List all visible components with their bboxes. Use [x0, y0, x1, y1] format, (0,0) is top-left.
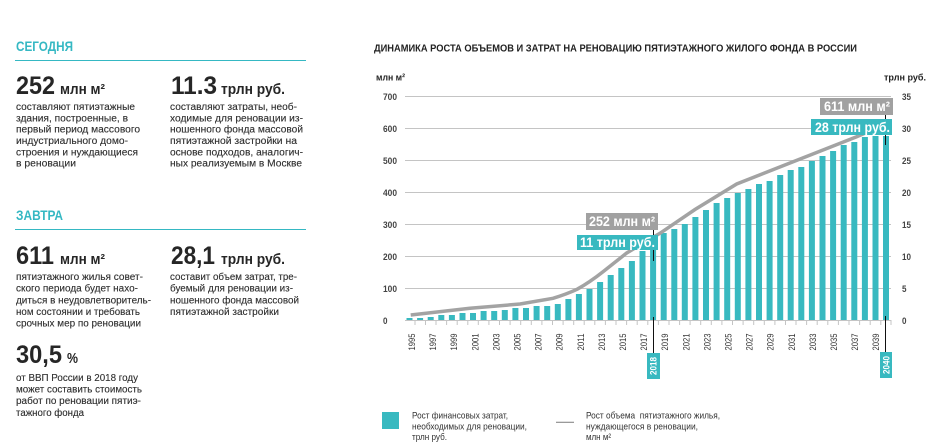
text block: 30.5 description: от ВВП России в 2018 году [16, 373, 138, 384]
text block: 30.5 description: тажного фонда [16, 407, 84, 419]
text block: 252 description [16, 102, 140, 170]
line: housing volume [411, 124, 886, 315]
right axis: trillion rub: 20 [902, 188, 911, 199]
left axis: million m2: 300 [383, 220, 397, 231]
text block: 252 description: первый период массового [16, 125, 140, 136]
text block: 252 description: в реновации [16, 158, 76, 170]
text block: 11.3 description: ных реализуемым в Москве [170, 158, 302, 170]
legend [382, 410, 720, 443]
x axis years: 1995 [407, 334, 418, 350]
left axis: million m2: 200 [383, 252, 397, 263]
right axis: trillion rub: 5 [902, 284, 907, 295]
x axis years: 2001 [470, 334, 481, 350]
callout: 11 trillion rub: 11 трлн руб. [580, 234, 655, 250]
year tag: 2018 [647, 353, 660, 379]
text block: 11.3 description: составляют затраты, необ- [170, 101, 297, 113]
x axis years: 2031 [787, 334, 798, 350]
x axis years: 2003 [491, 334, 502, 350]
text block: 11.3 description: пятиэтажной застройки на [170, 136, 297, 147]
legend: line label: нуждающегося в реновации, [586, 421, 698, 432]
text block: 611 description: ского периода будет нахо- [16, 283, 138, 295]
x axis years: 2033 [808, 334, 819, 350]
left axis: million m2: 500 [383, 156, 397, 167]
x axis years: 2019 [660, 334, 671, 350]
bars: financial costs [406, 136, 889, 320]
right axis: trillion rub: трлн руб. [884, 73, 926, 84]
x axis years: 2015 [618, 334, 629, 350]
x axis years: 2005 [512, 334, 524, 350]
stat: 611 million m2: млн м² [60, 252, 105, 268]
x axis years: 2037 [850, 334, 861, 350]
text block: 11.3 description [170, 101, 303, 170]
text block: 252 description: индустриального домо- [16, 136, 128, 147]
stat: 28.1 trillion rub: трлн руб. [221, 252, 285, 268]
stat: 611 million m2: 611 [16, 242, 54, 270]
x axis years: 2017 [639, 334, 650, 350]
text block: 611 description [16, 272, 151, 330]
chart title: ДИНАМИКА РОСТА ОБЪЕМОВ И ЗАТРАТ НА РЕНОВАЦИЮ ПЯТИЭТАЖНОГО ЖИЛОГО ФОНДА В РОССИИ [374, 44, 857, 54]
stat: 30.5 percent: % [67, 351, 78, 367]
left axis: million m2: 0 [383, 316, 388, 327]
heading: today: СЕГОДНЯ [16, 38, 73, 54]
text block: 611 description: пятиэтажного жилья совет- [16, 272, 143, 283]
left axis: million m2: 600 [383, 124, 397, 135]
stat: 252 million m2: млн м² [60, 82, 105, 98]
legend: line swatch [556, 422, 574, 423]
x axis years: 1999 [449, 334, 460, 350]
text block: 611 description: ном состоянии и требовать [16, 306, 140, 318]
legend: line label: млн м² [586, 432, 611, 443]
text block: 28.1 description: ношенного фонда массовой [170, 294, 299, 306]
legend: bars label: трлн руб. [412, 432, 447, 443]
right axis: trillion rub: 15 [902, 220, 912, 231]
x axis years: 2011 [576, 334, 587, 350]
callout: 252 million m2: 252 млн м² [589, 213, 655, 229]
x axis years: 2025 [724, 334, 734, 350]
stat: 252 million m2 [16, 72, 105, 100]
right axis: trillion rub: 10 [902, 252, 911, 263]
x axis years: 2023 [702, 334, 713, 350]
stat: 252 million m2: 252 [16, 72, 55, 100]
x axis years: 2013 [597, 334, 608, 350]
text block: 11.3 description: основе подходов, аналогич- [170, 147, 303, 158]
year tag: 2040: 2040 [881, 356, 891, 374]
legend: line label: Рост объема пятиэтажного жилья, [586, 410, 720, 422]
text block: 11.3 description: ношенного фонда массовой [170, 124, 303, 136]
panel: tomorrow [15, 207, 306, 419]
year tag: 2018: 2018 [648, 357, 658, 375]
x axis years: 2035 [829, 334, 840, 350]
text block: 28.1 description: составит объем затрат, тре- [170, 271, 297, 283]
right axis: trillion rub: 30 [902, 124, 911, 135]
legend: line label [586, 410, 720, 443]
right axis: trillion rub [884, 73, 926, 327]
year tag: 2040 [880, 352, 892, 378]
text block: 611 description: диться в неудовлетворитель- [16, 295, 151, 306]
text block: 11.3 description: ходимые для реновации из- [170, 113, 303, 124]
text block: 30.5 description: может составить стоимость [16, 384, 142, 395]
stat: 611 million m2 [16, 242, 105, 270]
left axis: million m2: 400 [383, 188, 397, 199]
panel: today [15, 38, 306, 170]
text block: 28.1 description: буемый для реновации из- [170, 283, 293, 295]
left axis: million m2: 700 [383, 92, 397, 103]
text block: 252 description: строения и нуждающиеся [16, 147, 138, 158]
x axis years: 2039 [871, 334, 882, 350]
stat: 28.1 trillion rub [171, 242, 285, 270]
text block: 30.5 description: работ по реновации пятиэ- [16, 395, 141, 407]
right axis: trillion rub: 35 [902, 92, 912, 103]
legend: bars label: Рост финансовых затрат, [412, 410, 508, 422]
x axis years [407, 334, 882, 350]
text block: 252 description: составляют пятиэтажные [16, 102, 135, 113]
right axis: trillion rub: 25 [902, 156, 912, 167]
callout: 28 trillion rub: 28 трлн руб. [815, 119, 890, 135]
stat: 11.3 trillion rub: 11.3 [171, 72, 217, 100]
stat: 30.5 percent: 30,5 [16, 341, 62, 369]
text block: 30.5 description [16, 373, 142, 419]
right axis: trillion rub: 0 [902, 316, 906, 327]
left axis: million m2: млн м² [376, 73, 405, 84]
text block: 252 description: здания, построенные, в [16, 113, 128, 124]
x axis years: 2009 [555, 334, 566, 350]
legend: bars swatch [382, 412, 399, 429]
x axis years: 2021 [681, 334, 692, 350]
left axis: million m2: 100 [383, 284, 397, 295]
combined chart [376, 73, 926, 379]
text block: 28.1 description [170, 271, 299, 318]
text block: 611 description: срочных мер по реновации [16, 319, 141, 330]
stat: 11.3 trillion rub [171, 72, 285, 100]
callout: 611 million m2: 611 млн м² [824, 98, 890, 114]
x axis years: 2027 [745, 334, 756, 350]
legend: bars label: необходимых для реновации, [412, 421, 527, 432]
text block: 28.1 description: пятиэтажной застройки [170, 307, 279, 318]
marker lines [654, 115, 886, 353]
stat: 28.1 trillion rub: 28,1 [171, 242, 215, 270]
stat: 11.3 trillion rub: трлн руб. [221, 82, 285, 98]
left axis: million m2 [376, 73, 405, 327]
x axis years: 2007 [534, 334, 545, 350]
legend: bars label [412, 410, 527, 443]
x axis years: 2029 [766, 334, 777, 350]
heading: tomorrow: ЗАВТРА [16, 207, 63, 223]
x axis years: 1997 [428, 334, 439, 350]
